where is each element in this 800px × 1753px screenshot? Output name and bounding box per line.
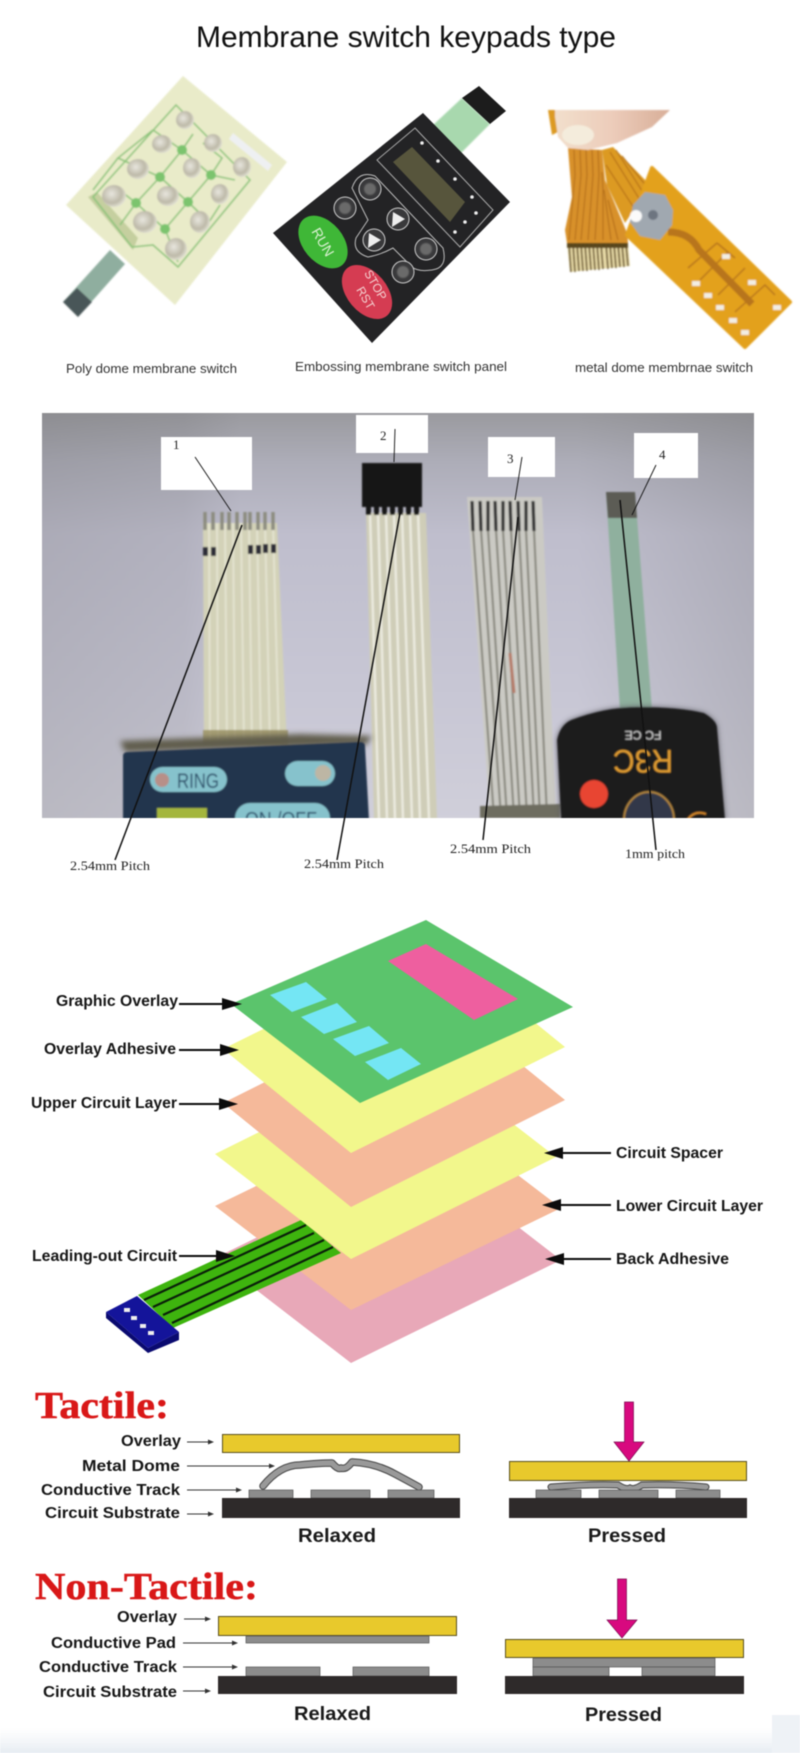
blue keypad [120,734,372,833]
LCD window [377,128,493,247]
black remote: R3C [613,743,673,779]
tactile arrows [187,1440,275,1516]
caption: metal dome: metal dome membrnae switch [575,360,753,375]
non-tactile pressed diagram [505,1579,744,1694]
press arrow [607,1579,637,1638]
STOP RST button: STOP [361,267,390,303]
label boxes [161,415,698,490]
tactile labels: Conductive Track [41,1482,180,1499]
keys [334,178,437,283]
non-tactile labels [39,1609,177,1701]
number labels: 2 [380,428,386,443]
finger [555,110,670,150]
non-tactile labels: Circuit Substrate [43,1684,177,1701]
layer labels: Upper Circuit Layer [31,1095,177,1112]
non-tactile labels: Conductive Track [39,1659,177,1676]
STOP RST button [332,255,402,329]
tactile labels [41,1433,181,1522]
non-tactile relaxed label: Relaxed [294,1704,371,1725]
tactile labels: Metal Dome [82,1458,180,1475]
heading: Non-Tactile: Non-Tactile: [35,1566,258,1608]
layer: circuit spacer [215,1052,556,1259]
caption: poly dome: Poly dome membrane switch [66,361,237,376]
number labels [173,428,666,466]
metal dome [263,1462,419,1487]
tactile labels: Overlay [121,1433,181,1450]
layer: back adhesive [215,1155,561,1363]
layer labels: Leading-out Circuit [32,1248,178,1265]
exploded layer diagram [106,920,573,1363]
tactile relaxed diagram [222,1434,460,1518]
layer labels: Lower Circuit Layer [616,1198,763,1215]
layer: overlay adhesive [223,943,565,1153]
leader lines [115,429,656,860]
press arrow [614,1402,644,1461]
heading: Tactile: Tactile: [35,1385,169,1427]
tactile labels: Circuit Substrate [45,1505,180,1522]
layer: graphic overlay [231,920,573,1103]
STOP RST button: RST [353,284,378,312]
tactile relaxed label: Relaxed [298,1526,376,1547]
RUN button: RUN [308,225,338,259]
ribbon 1 [203,512,288,745]
non-tactile arrows [183,1616,238,1694]
layer labels [31,993,763,1268]
layer labels: Circuit Spacer [616,1145,723,1162]
panel: poly dome membrane switch photo [63,76,287,317]
RUN button [288,206,358,278]
layer labels: Overlay Adhesive [44,1041,176,1058]
panel: embossing membrane switch photo [273,86,510,343]
pitch labels: 2.54mm Pitch [70,859,151,873]
non-tactile labels: Overlay [117,1609,177,1626]
layer arrows [179,998,611,1265]
ribbon 4 [606,492,652,710]
panel: connector pitch photo [42,413,754,860]
title: Membrane switch keypads type [196,21,616,54]
layer labels: Back Adhesive [616,1251,729,1268]
caption: embossing: Embossing membrane switch panel [295,359,507,374]
layer: upper circuit [223,996,565,1207]
non-tactile relaxed diagram [218,1616,457,1694]
ribbon 2 [362,463,437,819]
non-tactile labels: Conductive Pad [51,1635,176,1652]
blue keypad: RING [177,770,219,793]
black remote: FC CE [624,728,662,742]
layer: lower circuit [215,1104,561,1310]
non-tactile pressed label: Pressed [585,1705,662,1726]
pitch labels: 1mm pitch [625,847,686,861]
number labels: 1 [173,437,180,452]
layer labels: Graphic Overlay [56,993,178,1010]
pitch labels: 2.54mm Pitch [450,842,532,856]
pitch labels: 2.54mm Pitch [304,857,385,871]
blue keypad: ON /OFF [245,809,317,831]
leading-out circuit [106,1220,341,1353]
ribbon 3 [467,497,560,818]
number labels: 4 [659,447,666,462]
tactile pressed diagram [509,1402,747,1518]
tactile pressed label: Pressed [588,1526,666,1547]
flex ribbon to connector [565,148,630,272]
pitch labels [70,842,686,873]
panel: metal dome flex photo [548,110,790,347]
number labels: 3 [507,451,514,466]
black remote [553,703,728,819]
